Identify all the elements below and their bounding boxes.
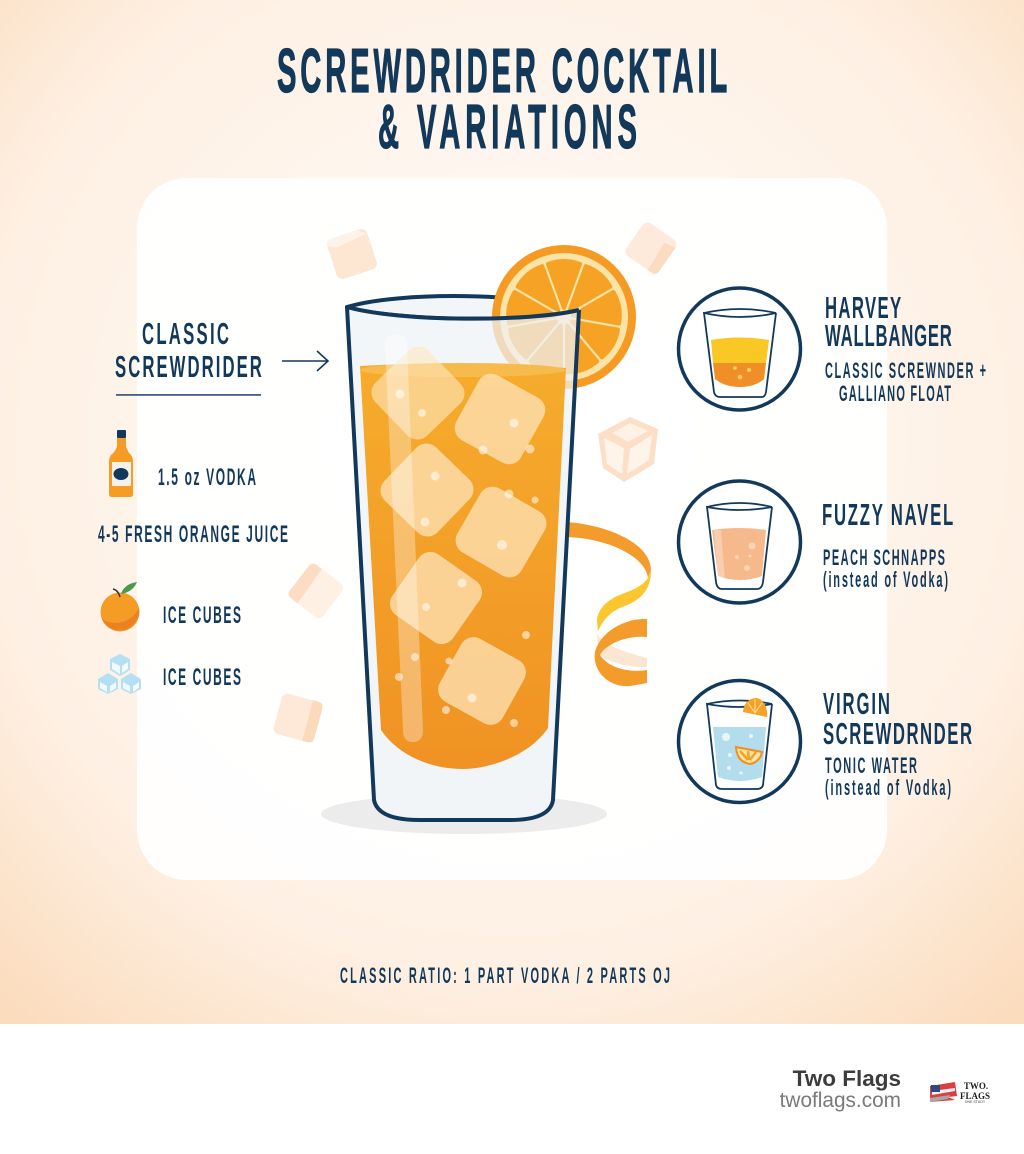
text: harvey wallbanger description: CLASSIC SCREWNDER +	[825, 358, 986, 383]
icon: bottle	[109, 430, 133, 497]
bubbles	[395, 390, 538, 727]
footer logo: FLAGS	[960, 1091, 990, 1101]
arrow	[282, 351, 328, 371]
glass back rim	[347, 296, 579, 319]
footer band	[0, 1024, 1024, 1154]
heading: fuzzy navel: FUZZY NAVEL	[822, 498, 953, 532]
title: & VARIATIONS	[378, 93, 637, 162]
text: vodka: 1.5 oz VODKA	[158, 465, 256, 491]
text: fuzzy navel description: (instead of Vodka)	[823, 567, 948, 592]
heading: virgin screwdrnder: VIRGIN	[823, 687, 890, 721]
glass	[347, 307, 579, 820]
ratio note: CLASSIC RATIO: 1 PART VODKA / 2 PARTS OJ	[340, 963, 670, 988]
footer brand text: Two Flags	[793, 1066, 901, 1091]
text: virgin description	[825, 753, 951, 800]
text: virgin description: TONIC WATER	[825, 753, 917, 778]
heading: harvey wallbanger	[825, 291, 952, 353]
shadow under glass	[321, 794, 607, 834]
ice cubes in juice	[366, 341, 552, 730]
text: fuzzy navel description	[823, 545, 948, 592]
icon: harvey wallbanger glass	[678, 288, 800, 410]
panel: harvey wallbanger	[678, 288, 986, 410]
title	[277, 37, 727, 162]
text: harvey wallbanger description: GALLIANO FLOAT	[839, 381, 951, 406]
footer brand text	[780, 1066, 901, 1112]
text: fuzzy navel description: PEACH SCHNAPPS	[823, 545, 945, 570]
heading: virgin screwdrnder	[823, 687, 972, 751]
text: harvey wallbanger description	[825, 358, 986, 406]
text: virgin description: (instead of Vodka)	[825, 775, 951, 800]
straw	[385, 335, 423, 742]
footer logo: ONE STUDY	[965, 1100, 986, 1104]
heading: classic screwdrider	[115, 317, 262, 384]
title: SCREWDRIDER COCKTAIL	[277, 37, 727, 106]
footer brand text: twoflags.com	[780, 1089, 901, 1112]
panel: classic screwdriver	[98, 317, 328, 694]
juice surface	[360, 363, 566, 377]
panel: virgin screwdriver	[678, 680, 972, 802]
glass outline	[347, 307, 579, 820]
icon: ice cubes	[98, 654, 141, 694]
heading: virgin screwdrnder: SCREWDRNDER	[823, 717, 972, 751]
text: ice cubes: ICE CUBES	[163, 603, 241, 629]
icon: orange	[100, 582, 140, 632]
heading: harvey wallbanger: WALLBANGER	[825, 319, 952, 353]
heading: classic screwdrider: CLASSIC	[142, 317, 229, 351]
main panel	[137, 178, 887, 880]
icon: virgin glass	[678, 680, 800, 802]
footer logo	[930, 1081, 990, 1104]
icon: orange slice	[492, 245, 636, 389]
icon: fuzzy navel glass	[678, 481, 800, 603]
glass body	[347, 307, 579, 820]
heading: classic screwdrider: SCREWDRIDER	[115, 350, 262, 384]
floating ice cubes	[272, 220, 679, 744]
heading: harvey wallbanger: HARVEY	[825, 291, 901, 325]
juice	[360, 363, 566, 769]
text: ice cubes: ICE CUBES	[163, 665, 241, 691]
panel: fuzzy navel	[678, 481, 953, 603]
icon: orange peel twist	[566, 522, 651, 686]
footer logo: TWO.	[964, 1081, 988, 1091]
text: orange juice: 4-5 FRESH ORANGE JUICE	[98, 522, 288, 548]
